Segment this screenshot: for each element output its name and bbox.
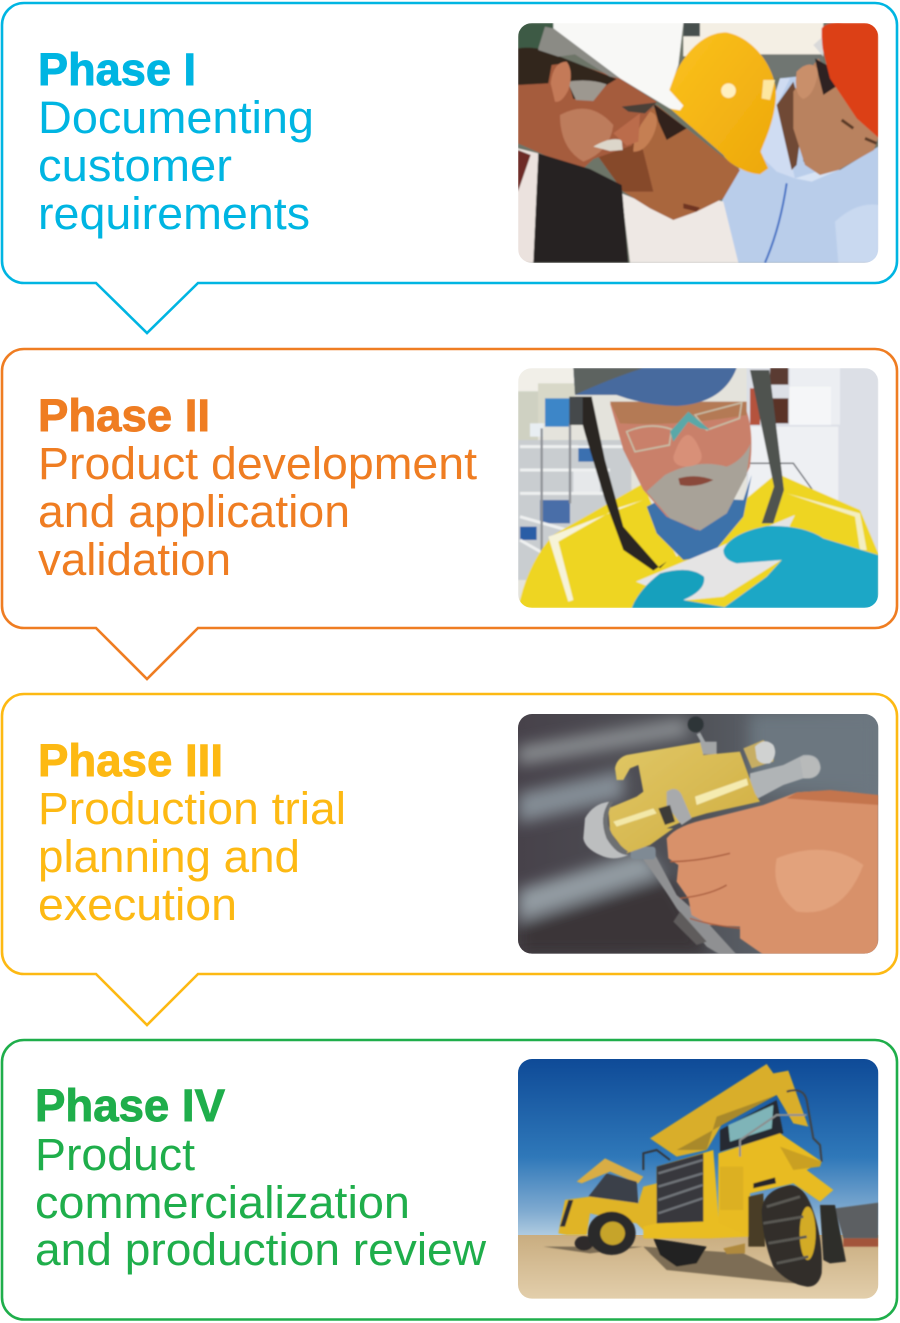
heading: Phase III: planning and (38, 831, 300, 882)
heading: Phase IV: Product (35, 1129, 196, 1180)
heading: Phase IV: Phase IV (35, 1080, 225, 1131)
heading: Phase II: and application (38, 486, 350, 537)
heading: Phase III: Production trial (38, 783, 346, 834)
panel: Phase III (2, 694, 897, 1025)
heading: Phase II: Product development (38, 438, 478, 489)
photo: hand holding a gold spray gun (518, 713, 878, 955)
heading: Phase II (38, 390, 478, 585)
heading: Phase I: requirements (38, 188, 310, 239)
callout outline with arrow (2, 349, 897, 679)
panel: Phase II (2, 349, 897, 679)
photo: yellow mining dump trucks (518, 1058, 878, 1300)
heading: Phase III: Phase III (38, 735, 223, 786)
heading: Phase I: Documenting (38, 92, 314, 143)
callout outline with arrow (2, 3, 897, 333)
panel: Phase IV (2, 1040, 897, 1320)
callout outline with arrow (2, 694, 897, 1025)
heading: Phase I: customer (38, 140, 232, 191)
heading: Phase II: Phase II (38, 390, 210, 441)
photo: three engineers in hard hats (518, 23, 878, 263)
heading: Phase III (38, 735, 346, 930)
callout outline (2, 1040, 897, 1320)
heading: Phase I (38, 44, 314, 239)
heading: Phase I: Phase I (38, 44, 196, 95)
panel: Phase I (2, 3, 897, 333)
heading: Phase IV: commercialization (35, 1177, 410, 1228)
heading: Phase IV (35, 1080, 486, 1275)
photo: technician in protective visor inspecting a cup (518, 368, 878, 608)
heading: Phase II: validation (38, 534, 231, 585)
heading: Phase IV: and production review (35, 1224, 486, 1275)
heading: Phase III: execution (38, 879, 237, 930)
